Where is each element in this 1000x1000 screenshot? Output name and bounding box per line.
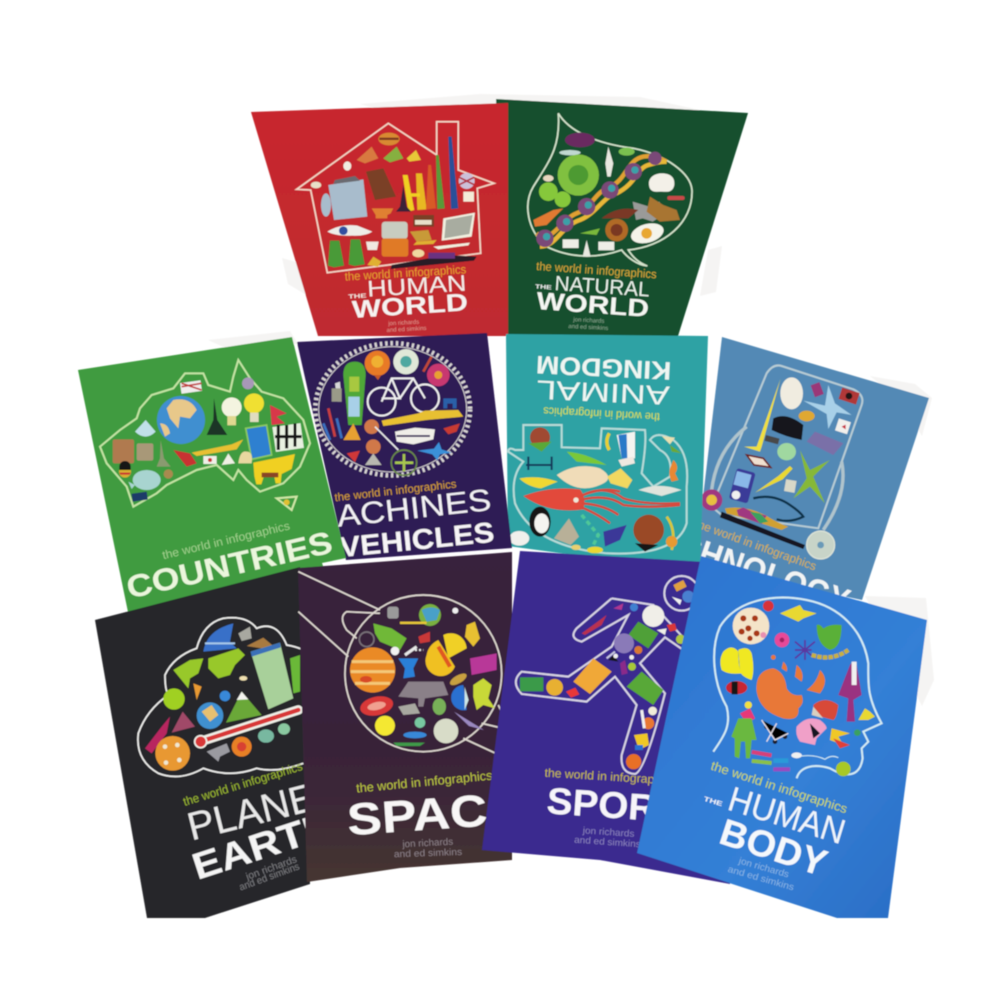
title: Animal Kingdom, upside down: the world in infographics <box>543 404 660 422</box>
illustration: cog ring of machines <box>315 343 470 475</box>
cover: red <box>251 103 508 336</box>
book: Countries <box>78 337 346 612</box>
book: Technology <box>636 337 929 621</box>
book: Sport <box>482 551 730 884</box>
title: The Human World: THE <box>348 294 367 301</box>
book: Animal Kingdom <box>506 334 708 572</box>
illustration: head with body parts <box>713 598 882 778</box>
title: Space <box>345 769 524 860</box>
title: Animal Kingdom, upside down: ANIMAL <box>536 374 670 411</box>
cover: charcoal <box>95 567 310 918</box>
cover: bright blue <box>637 556 927 918</box>
title: The Human Body: and ed simkins <box>727 864 796 892</box>
title: Technology: the world in infographics <box>693 516 818 573</box>
cover: dark green <box>496 99 748 336</box>
title: The Human Body: THE <box>703 796 724 808</box>
title: The Human World: the world in infographics <box>344 262 467 284</box>
illustration: teapot with animals <box>508 425 687 554</box>
title: The Human Body: the world in infographics <box>709 759 849 816</box>
cover: deep purple <box>297 333 512 560</box>
title: The Human World <box>344 262 469 334</box>
title: The Natural World <box>535 259 657 332</box>
cover: steel blue <box>695 337 929 600</box>
title: Planet Earth: the world in infographics <box>181 759 304 809</box>
cover: teal <box>506 334 708 572</box>
title: The Natural World: THE <box>535 284 552 291</box>
book: The Human Body <box>637 556 927 918</box>
title: The Human Body: BODY <box>715 810 833 884</box>
book: Space <box>298 552 524 882</box>
title: The Human World: jon richards <box>387 320 419 327</box>
cover: green <box>78 337 346 612</box>
title: Countries: the world in infographics <box>161 519 291 562</box>
title: Sport: jon richards <box>581 825 635 839</box>
illustration: Australia map <box>100 360 310 510</box>
title: The Human World: HUMAN <box>366 270 467 302</box>
book: The Natural World <box>496 99 748 336</box>
illustration: rocket-shaped technology outline <box>701 365 862 559</box>
title: Machines and Vehicles: MACHINES <box>306 483 493 537</box>
background: pale paper shadows <box>208 94 934 706</box>
title: Countries: COUNTRIES <box>123 525 336 605</box>
title: The Natural World: WORLD <box>536 288 650 323</box>
book: The Human World <box>251 103 508 336</box>
title: The Natural World: and ed simkins <box>568 324 608 332</box>
book: Planet Earth <box>95 567 344 918</box>
title: Sport: the world in infographics <box>544 766 676 788</box>
title: The Human Body <box>703 759 850 892</box>
title: Planet Earth: jon richards <box>244 854 298 883</box>
title: Technology: TECHNOLOGY <box>636 514 855 621</box>
illustration: leaf with DNA <box>528 113 692 266</box>
title: Sport <box>544 766 682 849</box>
title: Planet Earth: and ed simkins <box>238 861 301 893</box>
cover: indigo <box>482 551 730 884</box>
title: Space: the world in infographics <box>356 769 493 796</box>
title: Planet Earth <box>181 759 344 893</box>
title: Planet Earth: EARTH <box>187 802 339 888</box>
cover: plum <box>298 552 512 882</box>
title: Space: SPACE <box>345 782 524 845</box>
title: The Natural World: jon richards <box>572 317 604 325</box>
title: The Human World: WORLD <box>351 289 469 324</box>
title: Animal Kingdom, upside down <box>535 350 672 422</box>
title: Machines and Vehicles: VEHICLES <box>338 517 496 564</box>
title: The Natural World: NATURAL <box>554 272 650 302</box>
title: Machines and Vehicles: the world in infographics <box>334 478 458 504</box>
title: Animal Kingdom, upside down: KINGDOM <box>535 350 672 384</box>
title: Space: and ed simkins <box>394 847 463 860</box>
title: Sport: SPORT <box>545 779 682 831</box>
book: Machines and Vehicles <box>297 333 512 564</box>
title: The Human Body: jon richards <box>737 855 791 880</box>
title: The Human Body: HUMAN <box>724 780 850 852</box>
title: Machines and Vehicles <box>306 478 496 564</box>
title: The Natural World: the world in infographics <box>536 259 657 281</box>
title: Sport: and ed simkins <box>574 835 641 849</box>
illustration: house <box>297 122 494 273</box>
illustration: cloud <box>138 618 303 777</box>
title: Planet Earth: PLANET <box>183 769 344 849</box>
title: Space: jon richards <box>401 837 454 850</box>
illustration: running figure <box>516 576 699 774</box>
title: The Human World: and ed simkins <box>386 326 427 334</box>
illustration: magnifying glass with planets <box>298 572 510 760</box>
